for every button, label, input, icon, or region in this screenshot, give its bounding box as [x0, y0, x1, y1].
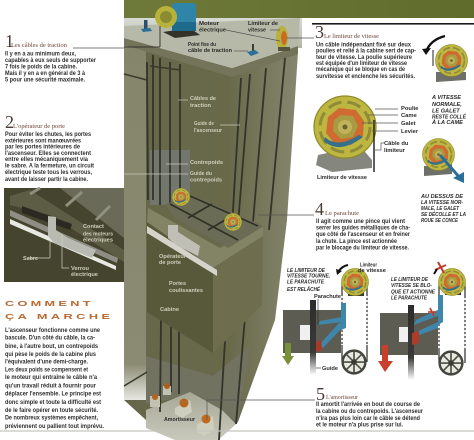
icon: electric motor: [124, 3, 200, 47]
shaft labels: Opérateur: [159, 254, 187, 260]
shock absorbers: [150, 383, 214, 436]
panel: section 3 speed limiter: survitesse et enclenche les sécurités.: [316, 73, 415, 80]
diagram: limiter turning, brake released: LE PARACHUTE: [287, 280, 324, 286]
arrow: blue lever: [440, 155, 464, 183]
caption: over speed: AU DESSUS DE: [420, 194, 463, 200]
panel: section 1 traction cables: [5, 31, 97, 84]
panel: section 4 safety gear: la chute. La pince est actionnée: [316, 238, 397, 245]
diagram: limiter turning, brake released: de vitesse: [358, 268, 387, 274]
diagram: limiter turning, brake released: VITESSE TOURNE,: [287, 274, 330, 280]
diagram: limiter blocked, brake engaged: QUE ET ACTIONNE: [391, 290, 435, 296]
diagram: limiter turning, brake released: Limiteur: [360, 262, 378, 268]
panel: section 1 traction cables: 1: [5, 31, 14, 51]
panel: section 1 traction cables: 5 pour une sécurité maximale.: [5, 77, 85, 84]
panel: section 3 speed limiter: Le limiteur de vitesse: [324, 33, 379, 40]
panel: section 1 traction cables: Il y en a au minimum deux,: [5, 50, 76, 58]
panel: section 3 speed limiter: poulies et relié à la cabine sert de cap-: [316, 48, 416, 54]
panel: section 4 safety gear: Le parachute: [325, 210, 359, 217]
panel: section 2 door operator: 2: [5, 112, 14, 132]
panel: section 3 speed limiter: Un câble indépendant fixé sur deux: [316, 42, 412, 48]
panel: how it works: de le faire opérer en toute sécurité.: [5, 407, 98, 414]
caption: over speed: LA VITESSE NOR-: [421, 200, 463, 206]
shaft labels: coulissantes: [169, 288, 203, 294]
panel: how it works: bascule. D'un côté du câble, la ca-: [5, 334, 95, 342]
panel: section 5 buffer: n'ira pas plus loin car le câble se détend: [316, 415, 420, 422]
panel: section 4 safety gear: serrer les guides métalliques de cha-: [316, 224, 410, 232]
panel: section 5 buffer: 5: [316, 384, 325, 404]
shaft labels: traction: [190, 103, 212, 109]
caption: normal speed: A VITESSE: [431, 95, 461, 101]
panel: section 3 speed limiter: teur de vitesse. La poulie supérieure: [316, 54, 412, 61]
panel: section 4 safety gear: [315, 199, 411, 252]
panel: section 1 traction cables: Les câbles de traction: [11, 42, 68, 49]
leader lines: [124, 100, 240, 174]
panel: how it works: donc simple et toute la difficulté est: [5, 399, 101, 406]
shaft labels: Limiteur de: [248, 21, 279, 27]
shaft labels: Guide du: [190, 171, 213, 177]
panel: how it works: bine, à l'autre bout, un contrepoids: [5, 343, 98, 350]
panel: section 5 buffer: la cabine ou du contrepoids. L'ascenseur: [316, 408, 424, 415]
panel: how it works: [5, 299, 110, 430]
illustration: speed limiter large: Limiteur de vitesse: [317, 175, 368, 181]
panel: section 2 door operator: par les portes intérieures de: [5, 144, 80, 151]
panel: how it works: le moteur qui entraîne le câble n'a: [5, 374, 98, 381]
panel: section 2 door operator: [5, 112, 94, 183]
diagram: limiter turning, brake released: Guide: [322, 366, 339, 372]
caption: over speed: [420, 194, 466, 224]
panel: section 5 buffer: [316, 384, 424, 428]
illustration: door mechanism: [4, 188, 124, 282]
shaft labels: Amortisseur: [164, 417, 196, 423]
panel: section 2 door operator: Pour éviter les chutes, les portes: [5, 131, 91, 138]
caption: over speed: SE DÉCOLLE ET LA: [421, 210, 466, 218]
diagram: limiter turning, brake released: Parachute: [314, 294, 342, 300]
panel: section 4 safety gear: par le blocage du limiteur de vitesse.: [316, 244, 409, 252]
shaft labels: vitesse: [248, 28, 267, 34]
shaft labels: l'ascenseur: [194, 128, 223, 134]
top green band: [124, 0, 474, 18]
diagram: limiter blocked, brake engaged: [378, 262, 466, 380]
diagram: limiter turning, brake released: EST RELÂCHÉ: [287, 285, 320, 293]
arrow: rotation: [426, 36, 445, 52]
panel: section 3 speed limiter: mécanique qui se bloque en cas de: [316, 66, 405, 73]
shaft labels: câble de traction: [188, 48, 232, 54]
panel: section 4 safety gear: 4: [315, 199, 324, 219]
panel: section 2 door operator: le sabre. A la fermeture, un circuit: [5, 162, 94, 170]
diagram: limiter turning, brake released: [282, 262, 387, 375]
shaft labels: de porte: [159, 260, 181, 266]
panel: section 1 traction cables: 7 fois le poids de la cabine.: [5, 64, 77, 70]
shaft labels: Point fixe du: [188, 42, 216, 48]
panel: section 5 buffer: L'amortisseur: [326, 394, 359, 401]
illustration: door mechanism: électriques: [83, 238, 113, 244]
panel: section 5 buffer: et le moteur n'a plus prise sur lui.: [316, 422, 403, 428]
illustration: speed limiter large: Câble du: [384, 141, 409, 147]
diagram: limiter turning, brake released: LE LIMITEUR DE: [287, 268, 325, 274]
shaft labels: Cabine: [160, 307, 179, 313]
panel: how it works: COMMENT: [5, 299, 91, 308]
illustration: door mechanism: Contact: [83, 224, 104, 230]
illustration: speed limiter large: Came: [401, 113, 418, 119]
illustration: elevator shaft: [124, 18, 302, 440]
caption: normal speed: [431, 95, 466, 126]
caption: over speed: ROUE SE CONCE: [421, 218, 458, 224]
panel: section 4 safety gear: Il agit comme une pince qui vient: [316, 218, 405, 225]
panel: how it works: préviennent ou pallient tout imprévu.: [5, 423, 104, 430]
shaft labels: Portes: [169, 281, 186, 287]
diagram: limiter blocked, brake engaged: LE PARACHUTE: [391, 296, 427, 302]
panel: section 2 door operator: L'opérateur de porte: [13, 123, 65, 130]
illustration: door mechanism: Verrou: [71, 266, 90, 272]
panel: section 2 door operator: extérieures sont manœuvrées: [5, 138, 81, 145]
panel: section 2 door operator: avant de laisser partir la cabine.: [5, 176, 88, 183]
icon: cable fixing point: [247, 44, 259, 56]
panel: section 4 safety gear: que côté de l'ascenseur et en freiner: [316, 231, 411, 238]
panel: how it works: qu'un travail réduit à fournir pour: [5, 382, 97, 390]
shaft labels: Câbles de: [190, 96, 216, 102]
panel: section 2 door operator: entre elles mécaniquement via: [5, 156, 89, 163]
panel: section 1 traction cables: capables à eux seuls de supporter: [5, 57, 97, 64]
illustration: speed limiter large: limiteur: [384, 148, 406, 154]
leader lines dark: [73, 30, 315, 420]
panel: how it works: Les deux poids se compensent et: [5, 366, 88, 374]
caption: over speed: MALE, LE GALET: [421, 206, 459, 212]
panel: section 1 traction cables: Mais il y en a en général de 3 à: [5, 70, 85, 77]
shaft labels: électrique: [199, 28, 227, 34]
panel: section 5 buffer: Il amortit l'arrivée en bout de course de: [316, 401, 420, 408]
shaft labels: Moteur: [199, 21, 220, 27]
shaft labels: [159, 21, 279, 423]
illustration: limiter at normal speed: [422, 36, 467, 82]
illustration: speed limiter large: [314, 96, 419, 181]
cabin: [147, 196, 264, 353]
caption: normal speed: RESTE COLLÉ: [432, 112, 466, 120]
illustration: limiter over speed: [423, 139, 464, 183]
panel: how it works: ÇA MARCHE: [5, 312, 110, 321]
caption: normal speed: NORMALE,: [432, 102, 462, 108]
bottom rule: [0, 430, 474, 432]
panel: how it works: déplacer l'ensemble. Le principe est: [5, 390, 101, 398]
illustration: speed limiter large: Levier: [401, 129, 419, 135]
caption: normal speed: LE GALET: [432, 108, 460, 114]
illustration: door mechanism: électrique: [71, 272, 98, 278]
diagram: limiter blocked, brake engaged: LE LIMITEUR DE: [391, 277, 428, 283]
panel: section 2 door operator: électrique teste tous les verrous,: [5, 169, 92, 176]
panel: how it works: l'équivalent d'une demi-charge.: [5, 358, 88, 366]
shaft labels: Guide de: [194, 121, 214, 127]
shaft labels: contrepoids: [190, 178, 222, 184]
panel: how it works: L'ascenseur fonctionne comme une: [5, 327, 101, 334]
diagram: limiter blocked, brake engaged: VITESSE SE BLO-: [391, 283, 432, 289]
illustration: door mechanism: Sabre: [23, 256, 38, 262]
counterweight pulleys: [172, 188, 242, 231]
illustration: speed limiter large: Galet: [401, 121, 416, 127]
icon: speed limiter on roof: [276, 26, 290, 51]
caption: normal speed: À LA CAME: [431, 119, 463, 126]
panel: section 3 speed limiter: est équipée d'un limiteur de vitesse: [316, 60, 407, 67]
shaft labels: Contrepoids: [190, 160, 223, 166]
panel: how it works: qui pèse le poids de la cabine plus: [5, 351, 96, 358]
illustration: door mechanism: des moteurs: [83, 232, 113, 238]
icon: cable fixing point left: [141, 20, 152, 32]
panel: how it works: De nombreux systèmes empêchent,: [5, 414, 98, 422]
top rule right: [312, 23, 474, 25]
panel: section 2 door operator: l'ascenseur. Elles se connectent: [5, 150, 91, 157]
door rail on cabin: [147, 226, 217, 276]
illustration: speed limiter large: Poulie: [401, 106, 419, 112]
panel: section 3 speed limiter: [315, 22, 416, 80]
panel: section 3 speed limiter: 3: [315, 22, 324, 42]
